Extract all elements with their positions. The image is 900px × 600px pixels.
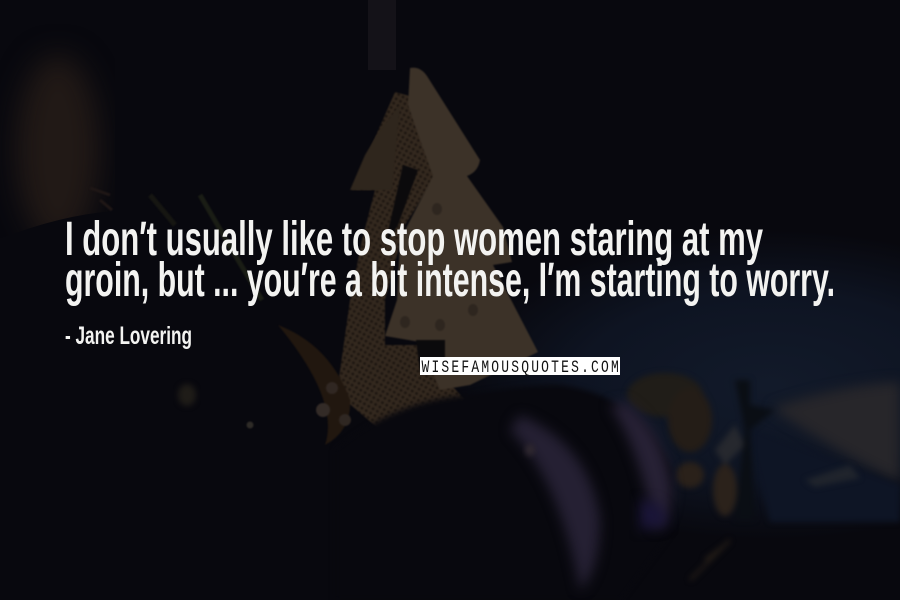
hanging ribbon	[368, 0, 396, 70]
quote text	[65, 213, 835, 307]
ornament: textured gingerbread tree	[278, 92, 465, 445]
background photo	[11, 54, 900, 524]
foliage left	[90, 188, 262, 428]
foliage right	[627, 373, 860, 580]
ornament: pale tree	[350, 68, 538, 390]
baubles	[335, 385, 672, 600]
watermark badge: WISEFAMOUSQUOTES.COM	[422, 357, 619, 378]
author: - Jane Lovering	[65, 322, 192, 350]
